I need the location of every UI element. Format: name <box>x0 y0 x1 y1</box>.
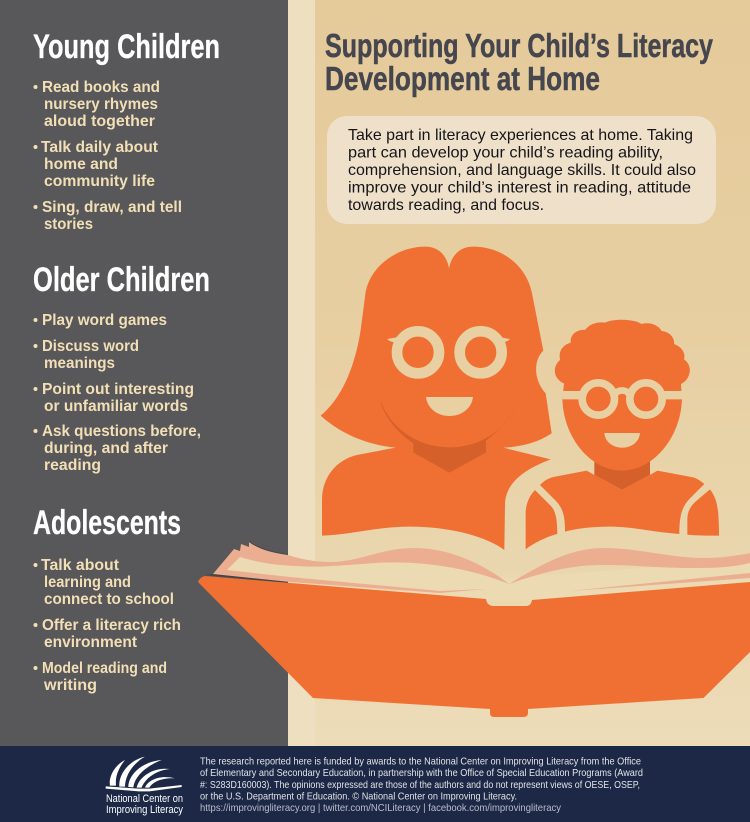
mother glasses <box>397 331 502 373</box>
book cover <box>198 576 750 717</box>
list: adolescent tips: environment <box>44 634 138 651</box>
list: older children tips: Play word games <box>42 312 167 329</box>
heading: Young Children: Young Children <box>33 28 220 66</box>
list: young children tips: home and <box>44 156 118 173</box>
heading: Adolescents: Adolescents <box>33 504 181 542</box>
callout: intro text: part can develop your child’s reading ability, <box>348 144 663 162</box>
dark page shadow <box>205 541 288 583</box>
logo: National Center on Improving Literacy <box>106 757 183 816</box>
list: young children tips: community life <box>44 173 155 190</box>
callout: intro text: Take part in literacy experiences at home. Taking <box>348 127 693 144</box>
footer text <box>200 756 643 814</box>
footer text: of Elementary and Secondary Education, in partnership with the Office of Special Education Programs (Award <box>200 767 643 779</box>
sidebar background <box>0 0 288 746</box>
footer text: The research reported here is funded by awards to the National Center on Improving Literacy from the Office <box>200 756 641 768</box>
callout: intro text: improve your child’s interest in reading, attitude <box>348 180 691 196</box>
list: older children tips: or unfamiliar words <box>44 398 188 415</box>
mother neck shadow <box>380 398 518 473</box>
callout: intro text <box>327 116 716 224</box>
page edges left <box>213 542 509 593</box>
mother hair and body <box>321 247 552 550</box>
list: young children tips: Talk daily about <box>41 139 159 156</box>
footer text: #: S283D160003). The opinions expressed are those of the authors and do not represent views of OESE, OSEP, <box>200 779 640 791</box>
title: Development at Home <box>325 60 600 97</box>
list: older children tips: during, and after <box>44 440 168 457</box>
list: young children tips <box>34 79 182 233</box>
child neck <box>594 457 650 490</box>
list: adolescent tips <box>34 557 181 694</box>
list: young children tips: Read books and <box>42 79 160 96</box>
child smile <box>604 433 640 448</box>
panel: age group guidance <box>33 28 220 694</box>
child left arm <box>526 490 557 549</box>
list: adolescent tips: Model reading and <box>42 660 167 677</box>
child right arm <box>687 489 719 536</box>
logo mark <box>106 757 182 791</box>
list: young children tips: nursery rhymes <box>44 96 158 113</box>
child torso <box>540 471 704 534</box>
child hair <box>555 320 690 400</box>
list: adolescent tips: Talk about <box>41 557 120 574</box>
list: young children tips: Sing, draw, and tell <box>42 199 182 216</box>
list: adolescent tips: Offer a literacy rich <box>42 617 181 634</box>
footer text: https://improvingliteracy.org | twitter.com/NCILiteracy | facebook.com/improvingliteracy <box>200 802 562 814</box>
mother eyelashes <box>387 337 510 342</box>
list: older children tips: Ask questions before, <box>42 423 201 440</box>
callout: intro text: comprehension, and language skills. It could also <box>348 162 696 179</box>
illustration: mother <box>321 247 552 550</box>
child glasses <box>562 383 682 415</box>
page base <box>288 560 750 601</box>
illustration: child <box>526 320 719 549</box>
logo: National Center on Improving Literacy: Improving Literacy <box>106 804 183 816</box>
light page strip <box>288 0 315 746</box>
list: adolescent tips: connect to school <box>44 591 174 608</box>
list: older children tips: reading <box>44 457 101 474</box>
page edges right <box>509 548 750 584</box>
illustration: open book <box>198 541 750 717</box>
list: older children tips: Discuss word <box>42 338 139 355</box>
footer text: or the U.S. Department of Education. © National Center on Improving Literacy. <box>200 790 517 802</box>
footer band <box>0 746 750 822</box>
page sliver right <box>570 573 750 591</box>
list: adolescent tips: learning and <box>44 574 131 591</box>
logo text: National Center on <box>106 793 183 805</box>
list: older children tips <box>34 312 201 474</box>
main panel background <box>315 0 750 746</box>
heading: Older Children: Older Children <box>33 261 210 299</box>
list: older children tips: Point out interesting <box>42 381 194 398</box>
list: adolescent tips: writing <box>43 677 97 694</box>
mother smile <box>426 397 473 416</box>
child face <box>562 397 682 471</box>
title <box>325 27 713 97</box>
list: young children tips: stories <box>44 216 93 233</box>
page surface left <box>227 557 509 591</box>
list: older children tips: meanings <box>44 355 115 372</box>
callout: intro text: towards reading, and focus. <box>348 197 544 214</box>
list: young children tips: aloud together <box>44 113 155 130</box>
